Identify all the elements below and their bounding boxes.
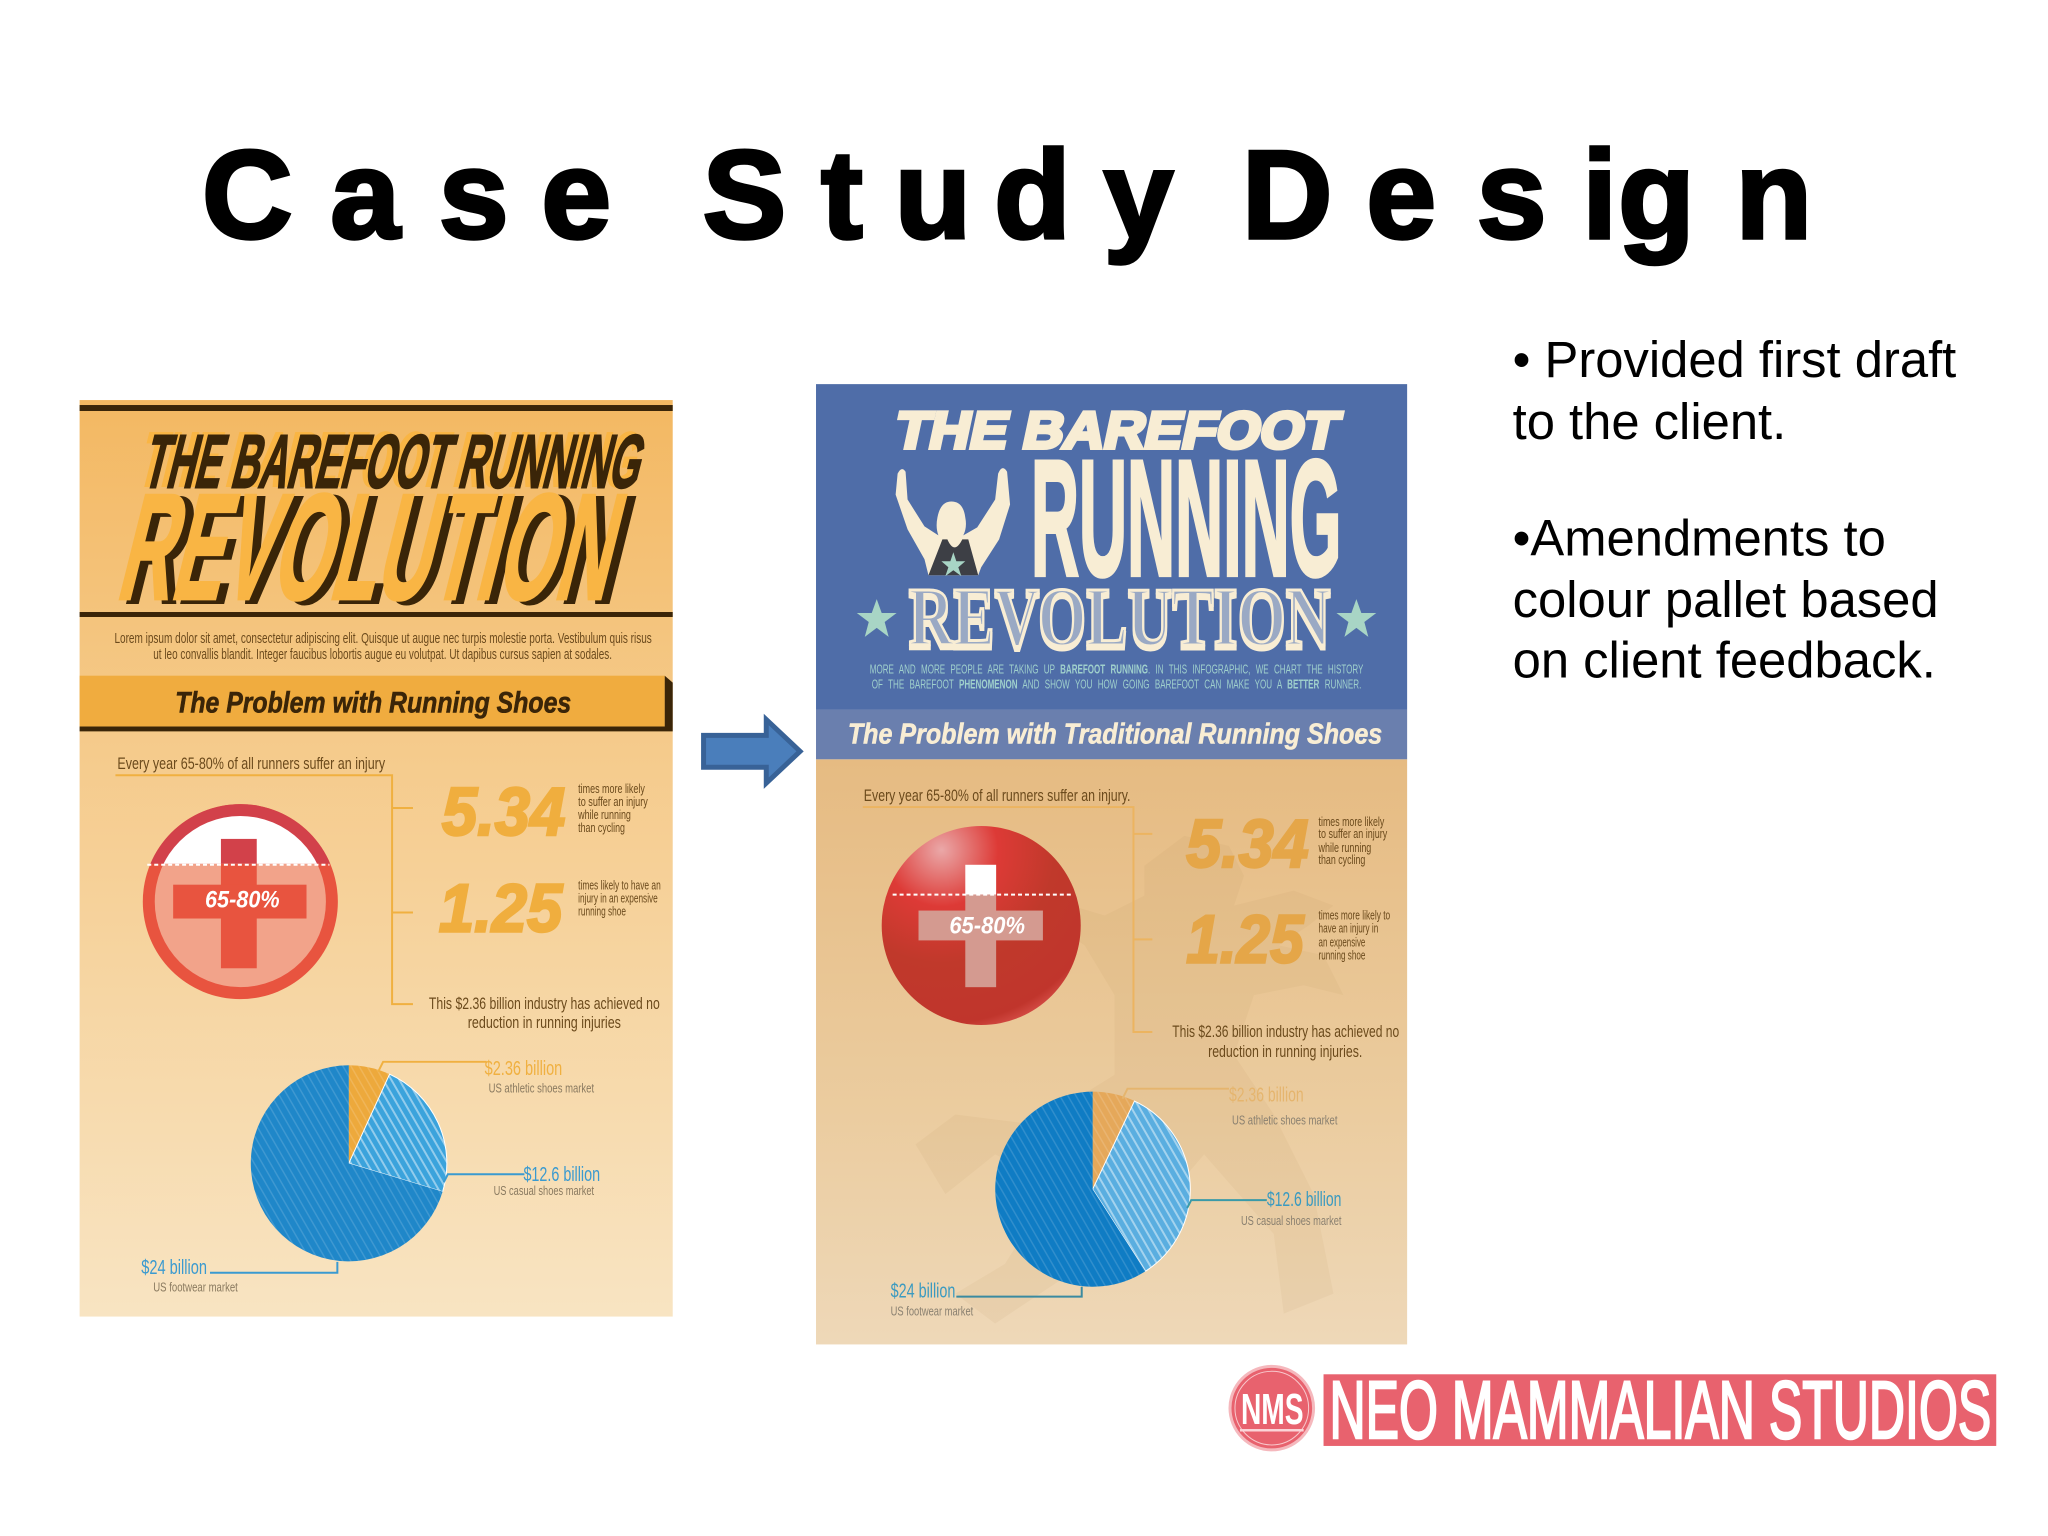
stat: 5.34: than cycling: [578, 821, 625, 835]
arrow: [704, 719, 800, 783]
stat: 1.25: times more likely to: [1319, 909, 1390, 923]
stat: 1.25: 1.25: [1186, 902, 1305, 977]
stat: 1.25: [439, 871, 661, 946]
intro text: OF THE BAREFOOT PHENOMENON AND SHOW YOU HOW GOING BAREFOOT CAN MAKE YOU A BETTER RUNNER.: [872, 677, 1361, 692]
icon: red cross percentage circle: [143, 804, 338, 999]
pie chart: market sizes: [251, 1065, 447, 1261]
panel: revised infographic: [816, 384, 1407, 1344]
pie label: casual: $12.6 billion: [523, 1164, 600, 1186]
headline: revolution: REVOLUTION: [106, 462, 640, 632]
intro text: ut leo convallis blandit. Integer faucibus lobortis augue eu volutpat. Ut dapibus cursus sapien at sodales.: [153, 646, 612, 663]
pie label: casual: US casual shoes market: [494, 1183, 594, 1198]
stat: 5.34: while running: [577, 808, 631, 822]
intro text: [870, 662, 1364, 692]
text block: notes: to the client.: [1513, 393, 1786, 450]
industry statement: [429, 994, 660, 1032]
stat: 5.34: 5.34: [442, 775, 565, 850]
connector lines: [115, 775, 413, 1004]
intro text: [114, 630, 652, 663]
stat: 5.34: [1186, 807, 1388, 882]
stat: 5.34: times more likely: [578, 782, 645, 796]
stat: 5.34: times more likely: [1319, 815, 1385, 829]
intro text: MORE AND MORE PEOPLE ARE TAKING UP BAREFOOT RUNNING. IN THIS INFOGRAPHIC, WE CHART THE HISTORY: [870, 662, 1364, 677]
injury statement: Every year 65-80% of all runners suffer an injury.: [864, 786, 1130, 805]
text block: notes: on client feedback.: [1513, 632, 1936, 689]
stat: 5.34: 5.34: [1186, 807, 1309, 882]
stat: 1.25: running shoe: [578, 905, 626, 919]
pie label: athletic: $2.36 billion: [1229, 1085, 1304, 1107]
pie label: athletic: US athletic shoes market: [1232, 1113, 1338, 1128]
stat: 1.25: injury in an expensive: [578, 892, 658, 906]
stat: 1.25: times likely to have an: [578, 879, 661, 893]
stat: 1.25: have an injury in: [1319, 921, 1378, 935]
section band: The Problem with Running Shoes: [175, 687, 571, 720]
text: RUNNING: [1031, 426, 1341, 611]
industry statement: This $2.36 billion industry has achieved no: [429, 994, 660, 1013]
logo: Neo Mammalian Studios: NMS: [1241, 1385, 1304, 1434]
stat: 1.25: running shoe: [1319, 948, 1365, 962]
stat: 1.25: 1.25: [439, 871, 564, 946]
industry statement: This $2.36 billion industry has achieved no: [1172, 1022, 1399, 1041]
injury statement: Every year 65-80% of all runners suffer an injury: [117, 754, 386, 773]
icon: right star: [1336, 599, 1376, 637]
pie label: casual: [1187, 1189, 1342, 1228]
pie chart: market sizes: [995, 1092, 1190, 1287]
icon: runner with raised arms: [896, 468, 1010, 576]
intro text: Lorem ipsum dolor sit amet, consectetur adipiscing elit. Quisque ut augue nec turpis molestie porta. Vestibulum quis risus: [114, 630, 652, 647]
text block: notes: • Provided first draft: [1513, 331, 1956, 388]
stat: 5.34: to suffer an injury: [1319, 827, 1388, 841]
stat: 1.25: [1186, 902, 1390, 977]
text block: notes: •Amendments to: [1513, 509, 1886, 566]
text block: notes: colour pallet based: [1513, 571, 1939, 628]
section band: [80, 676, 673, 731]
headline: the barefoot running: THE BAREFOOT RUNNING: [137, 420, 654, 504]
headline: the barefoot: THE BAREFOOT: [890, 402, 1345, 460]
stat: 1.25: an expensive: [1319, 935, 1365, 949]
industry statement: reduction in running injuries: [468, 1013, 621, 1032]
industry statement: reduction in running injuries.: [1208, 1042, 1362, 1061]
headline: the barefoot running: THE BAREFOOT RUNNING: [132, 418, 649, 502]
pie label: casual: US casual shoes market: [1241, 1213, 1342, 1228]
pie label: footwear: $24 billion: [141, 1257, 207, 1279]
pie label: athletic: [1123, 1085, 1338, 1128]
pie label: footwear: [891, 1281, 1082, 1319]
headline: revolution: REVOLUTION: [909, 576, 1331, 668]
headline: revolution: [106, 462, 648, 635]
title: Case Study Design: [202, 124, 1812, 265]
section band heading: The Problem with Traditional Running Shoes: [848, 718, 1382, 750]
icon: left star: [857, 599, 897, 637]
headline: revolution: REVOLUTION: [114, 465, 648, 635]
pie label: athletic: US athletic shoes market: [489, 1081, 594, 1096]
stat: 5.34: than cycling: [1319, 853, 1365, 867]
icon: red cross percentage circle: 65-80%: [205, 887, 280, 914]
pie label: footwear: $24 billion: [891, 1281, 955, 1303]
stat: 5.34: to suffer an injury: [578, 795, 648, 809]
icon: glossy red cross ball: 65-80%: [949, 912, 1025, 939]
industry statement: [1172, 1022, 1399, 1061]
pie label: athletic: $2.36 billion: [485, 1058, 562, 1080]
pie label: footwear: [141, 1257, 337, 1295]
pie label: casual: [444, 1164, 600, 1198]
pie label: footwear: US footwear market: [153, 1280, 238, 1295]
panel: first draft infographic: [80, 400, 673, 1317]
stat: 5.34: [442, 775, 648, 850]
background runner silhouette: [916, 836, 1343, 1324]
pie label: footwear: US footwear market: [891, 1304, 974, 1319]
pie label: casual: $12.6 billion: [1267, 1189, 1341, 1211]
connector lines: [863, 807, 1152, 1032]
stat: 5.34: while running: [1318, 841, 1371, 855]
header rule: [80, 405, 673, 411]
headline: revolution: REVOLUTION: [909, 572, 1331, 664]
text block: notes: [1513, 331, 1956, 689]
headline: the barefoot running: [132, 418, 654, 504]
icon: glossy red cross ball: [882, 826, 1081, 1025]
pie label: athletic: [378, 1058, 594, 1096]
